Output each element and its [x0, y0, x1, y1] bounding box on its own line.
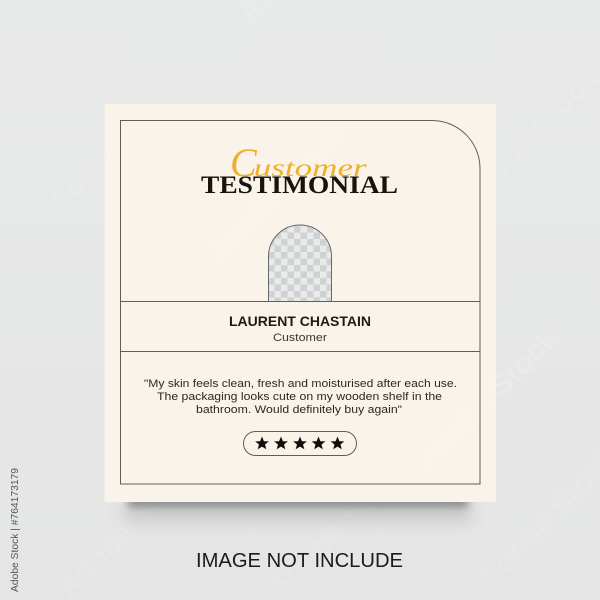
testimonial quote: The packaging looks cute on my wooden shelf in the: [157, 391, 442, 403]
star rating pill: [244, 432, 356, 456]
divider bottom of name band: [120, 350, 480, 352]
card watermarks: Adobe Stock: [412, 322, 565, 475]
card watermarks: Adobe Stock: [202, 117, 355, 270]
customer role: Customer: [273, 332, 327, 344]
five stars: [255, 436, 344, 449]
script word: Customer: Customer: [230, 140, 367, 185]
image placeholder arch: [268, 225, 332, 302]
card frame: [120, 120, 480, 484]
testimonial quote: [144, 378, 457, 416]
heading word: TESTIMONIAL: TESTIMONIAL: [201, 172, 398, 199]
panel: card: [104, 104, 565, 502]
note: image not included: IMAGE NOT INCLUDE: [196, 550, 403, 572]
stock watermarks: Adobe Stock: [42, 67, 195, 220]
divider top of name band: [120, 300, 480, 302]
testimonial quote: "My skin feels clean, fresh and moisturised after each use.: [144, 378, 457, 390]
side stock credit: Adobe Stock | #764173179: [9, 468, 21, 592]
heading: [201, 140, 398, 199]
testimonial quote: bathroom. Would definitely buy again": [196, 404, 402, 416]
customer name: LAURENT CHASTAIN: [229, 313, 371, 329]
card shadow: [125, 497, 470, 520]
card watermarks: [202, 117, 565, 475]
